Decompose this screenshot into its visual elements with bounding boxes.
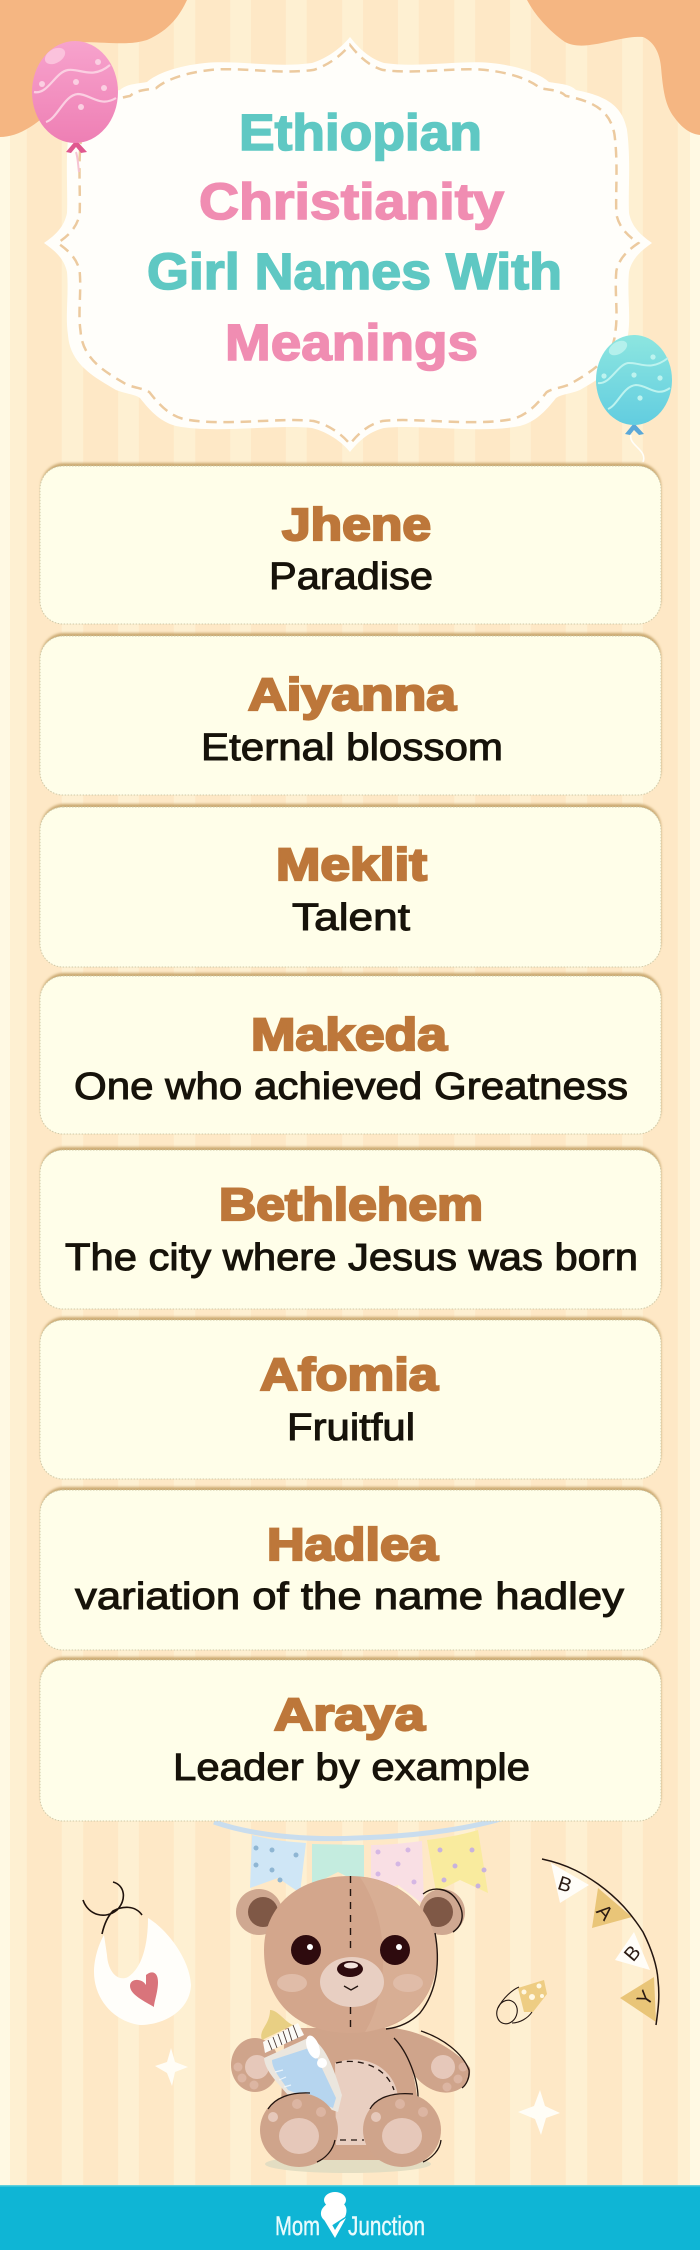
plaque: title background <box>44 37 652 452</box>
name: Meklit: Meklit <box>276 839 427 890</box>
icon: baby banner: B <box>555 1872 574 1897</box>
name: Bethlehem: Bethlehem <box>219 1179 483 1230</box>
meaning: Fruitful: Fruitful <box>287 1407 415 1449</box>
drape: top right <box>527 0 700 135</box>
icon: safety pin <box>493 1980 547 2027</box>
teddy bear <box>231 1876 470 2173</box>
meaning: variation of the name hadley: variation of the name hadley <box>75 1576 624 1618</box>
icon: bib <box>83 1882 191 2025</box>
name: Araya: Araya <box>274 1689 426 1740</box>
meaning: Paradise: Paradise <box>269 556 433 598</box>
title: Girl Names With <box>147 243 562 300</box>
logo: MomJunction wordmark <box>275 2211 425 2241</box>
name: Afomia: Afomia <box>260 1349 439 1400</box>
title: Ethiopian <box>239 104 482 161</box>
title: Meanings <box>225 314 478 371</box>
icon: baby banner: B <box>620 1941 645 1966</box>
card: Jhene <box>40 463 661 624</box>
head seam <box>350 1876 352 2033</box>
icon: pink balloon <box>32 41 118 172</box>
drape: top left <box>0 0 187 137</box>
name: Hadlea: Hadlea <box>267 1519 439 1570</box>
head shading <box>360 1877 437 2032</box>
head <box>264 1876 437 2033</box>
card: Bethlehem <box>40 1147 661 1309</box>
logo: MomJunction icon <box>321 2192 346 2238</box>
head outline <box>386 1933 437 2029</box>
card: Araya <box>40 1657 661 1821</box>
title <box>147 104 562 371</box>
meaning: Talent: Talent <box>292 897 411 939</box>
name: Aiyanna: Aiyanna <box>248 669 457 720</box>
meaning: The city where Jesus was born: The city where Jesus was born <box>65 1237 638 1279</box>
icon: baby banner: Y <box>633 1987 659 2010</box>
card: Aiyanna <box>40 633 661 795</box>
eyes <box>291 1935 410 1965</box>
bottle <box>261 2010 342 2112</box>
icon: star left <box>155 2048 188 2086</box>
card: Hadlea <box>40 1487 661 1650</box>
name: Jhene: Jhene <box>282 499 431 550</box>
meaning: Leader by example: Leader by example <box>173 1747 530 1789</box>
title: Christianity <box>199 173 505 230</box>
right arm <box>392 2028 470 2093</box>
body <box>280 2028 418 2160</box>
footer bar <box>0 2185 700 2250</box>
shadow under bear <box>265 2155 431 2173</box>
muzzle <box>320 1957 384 2007</box>
left foot <box>260 2093 338 2167</box>
card: Makeda <box>40 973 661 1134</box>
right foot <box>363 2093 441 2167</box>
meaning: One who achieved Greatness: One who achieved Greatness <box>74 1066 628 1108</box>
cheeks <box>277 1974 423 1992</box>
bunting: pastel flags <box>214 1813 518 1905</box>
icon: baby banner: A <box>592 1900 617 1925</box>
logo: MomJunction wordmark: Junction <box>348 2211 425 2241</box>
card: Meklit <box>40 804 661 967</box>
card: Afomia <box>40 1317 661 1479</box>
icon: teal balloon <box>596 335 672 462</box>
belly patch <box>335 2038 418 2145</box>
icon: star right <box>518 2090 560 2135</box>
ears <box>236 1889 465 1935</box>
logo: MomJunction wordmark: Mom <box>275 2211 320 2241</box>
icon: baby banner <box>542 1859 659 2025</box>
meaning: Eternal blossom: Eternal blossom <box>201 727 503 769</box>
left arm <box>231 2038 279 2092</box>
name: Makeda: Makeda <box>251 1009 448 1060</box>
